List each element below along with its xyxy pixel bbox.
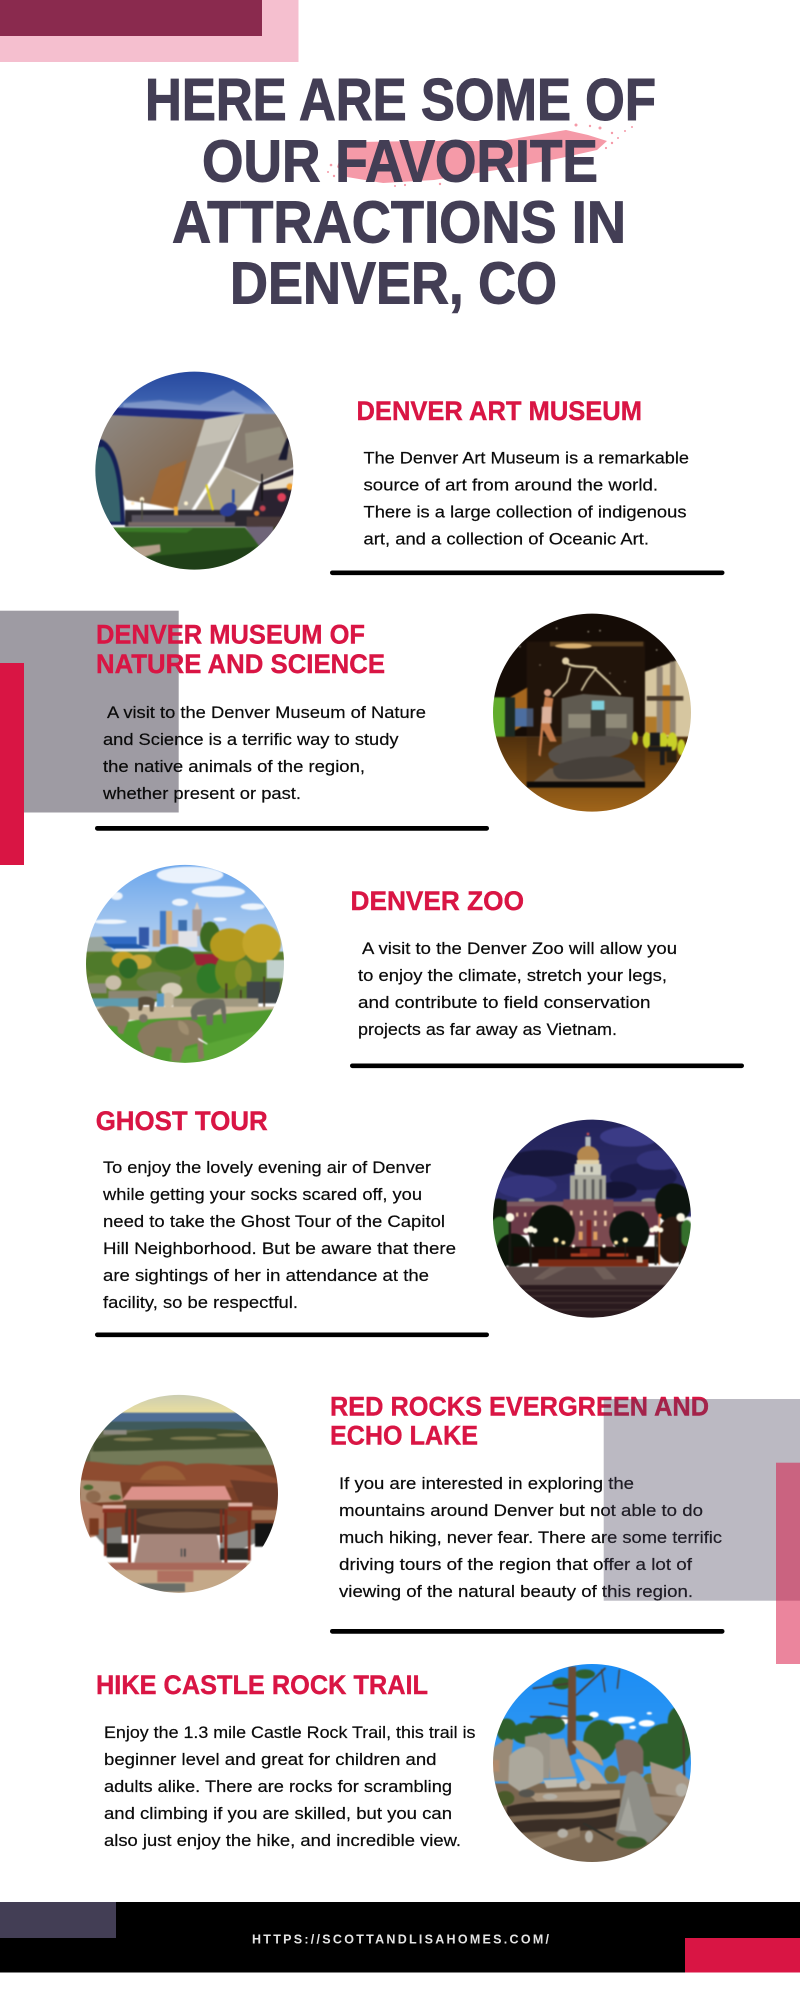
heading: Denver Zoo: DENVER ZOO [350,886,524,916]
translucent pink block right [776,1463,800,1664]
footer bar [0,1902,800,1972]
heading: Red Rocks Evergreen and Echo Lake: RED ROCKS EVERGREEN AND [330,1392,709,1422]
text: Ghost Tour description: while getting your socks scared off, you [102,1185,422,1204]
footer grey block [0,1902,116,1938]
text: Ghost Tour description: To enjoy the lovely evening air of Denver [103,1158,431,1177]
title: DENVER, CO [230,250,557,316]
photo: Denver Zoo [86,864,284,1063]
title [145,67,656,316]
panel: Denver Zoo [80,863,744,1077]
text: Denver Zoo description: and contribute to field conservation [358,993,650,1012]
text: Castle Rock Trail description: beginner level and great for children and [104,1750,437,1769]
text: Denver Art Museum description: source of art from around the world. [364,476,658,494]
photo: Denver Art Museum [95,372,294,570]
text: Castle Rock Trail description: adults alike. There are rocks for scrambling [104,1777,452,1796]
text: Denver Zoo description: to enjoy the climate, stretch your legs, [358,966,667,985]
photo: Red Rocks amphitheatre [77,1393,283,1596]
translucent grey block right [604,1399,800,1601]
text: Nature and Science description: whether present or past. [102,784,301,803]
photo: Museum of Nature and Science exhibit [490,610,697,817]
red block left [0,663,24,865]
text: Castle Rock Trail description [104,1723,476,1850]
text: Castle Rock Trail description: also just enjoy the hike, and incredible view. [104,1831,461,1850]
text: Ghost Tour description: facility, so be respectful. [103,1293,298,1312]
top-left maroon block [0,0,262,36]
text: Denver Art Museum description: There is a large collection of indigenous [364,502,686,522]
title: OUR FAVORITE [202,128,598,194]
heading: Hike Castle Rock Trail: HIKE CASTLE ROCK TRAIL [96,1670,428,1700]
text: Ghost Tour description [102,1158,456,1312]
heading: Denver Art Museum: DENVER ART MUSEUM [356,396,642,426]
text: Castle Rock Trail description: Enjoy the 1.3 mile Castle Rock Trail, this trail is [104,1723,476,1742]
heading: Denver Museum of Nature and Science: DENVER MUSEUM OF [96,620,365,650]
text: Ghost Tour description: Hill Neighborhood. But be aware that there [103,1239,456,1258]
text: Denver Zoo description: projects as far away as Vietnam. [358,1020,617,1039]
text: Nature and Science description: the native animals of the region, [103,757,365,776]
footer red block [685,1938,800,1972]
text: Red Rocks description: If you are interested in exploring the [339,1474,634,1493]
heading: Red Rocks Evergreen and Echo Lake: ECHO LAKE [330,1420,478,1450]
top-left pink block [0,0,298,62]
grey block behind museum of nature [0,611,179,812]
heading: Denver Museum of Nature and Science [96,620,385,679]
text: Nature and Science description [102,703,426,803]
text: Denver Art Museum description: art, and a collection of Oceanic Art. [364,530,649,548]
heading: Denver Museum of Nature and Science: NATURE AND SCIENCE [96,649,385,679]
text: Castle Rock Trail description: and climbing if you are skilled, but you can [104,1804,452,1823]
text: Ghost Tour description: need to take the Ghost Tour of the Capitol [103,1212,445,1231]
text: Red Rocks description: much hiking, never fear. There are some terrific [339,1528,723,1547]
text: Denver Art Museum description: The Denver Art Museum is a remarkable [364,448,689,468]
panel: Ghost Tour [95,1106,697,1337]
text: Red Rocks description [339,1474,723,1601]
heading: Red Rocks Evergreen and Echo Lake [330,1392,709,1450]
text: Red Rocks description: viewing of the natural beauty of this region. [339,1582,693,1601]
text: Red Rocks description: mountains around Denver but not able to do [339,1501,703,1520]
text: Denver Zoo description: A visit to the Denver Zoo will allow you [362,939,677,958]
heading: Ghost Tour: GHOST TOUR [96,1106,268,1136]
title: ATTRACTIONS IN [172,190,626,256]
text: Nature and Science description: A visit to the Denver Museum of Nature [107,703,426,722]
text: Nature and Science description: and Science is a terrific way to study [103,730,399,749]
title: HERE ARE SOME OF [145,67,656,133]
panel: Denver Museum of Nature and Science [95,610,697,831]
photo: Castle Rock Trail [493,1664,691,1862]
panel: Red Rocks Evergreen and Echo Lake [77,1392,724,1634]
panel: Denver Art Museum [90,367,725,577]
text: Ghost Tour description: are sightings of her in attendance at the [103,1266,429,1285]
text: Red Rocks description: driving tours of the region that offer a lot of [339,1555,692,1574]
brush stroke behind FAVORITE [327,124,633,187]
photo: Colorado State Capitol at night [489,1117,697,1322]
footer URL: HTTPS://SCOTTANDLISAHOMES.COM/ [252,1932,550,1946]
text: Denver Art Museum description [364,448,689,548]
text: Denver Zoo description [358,939,677,1039]
panel: Hike Castle Rock Trail [96,1660,700,1870]
